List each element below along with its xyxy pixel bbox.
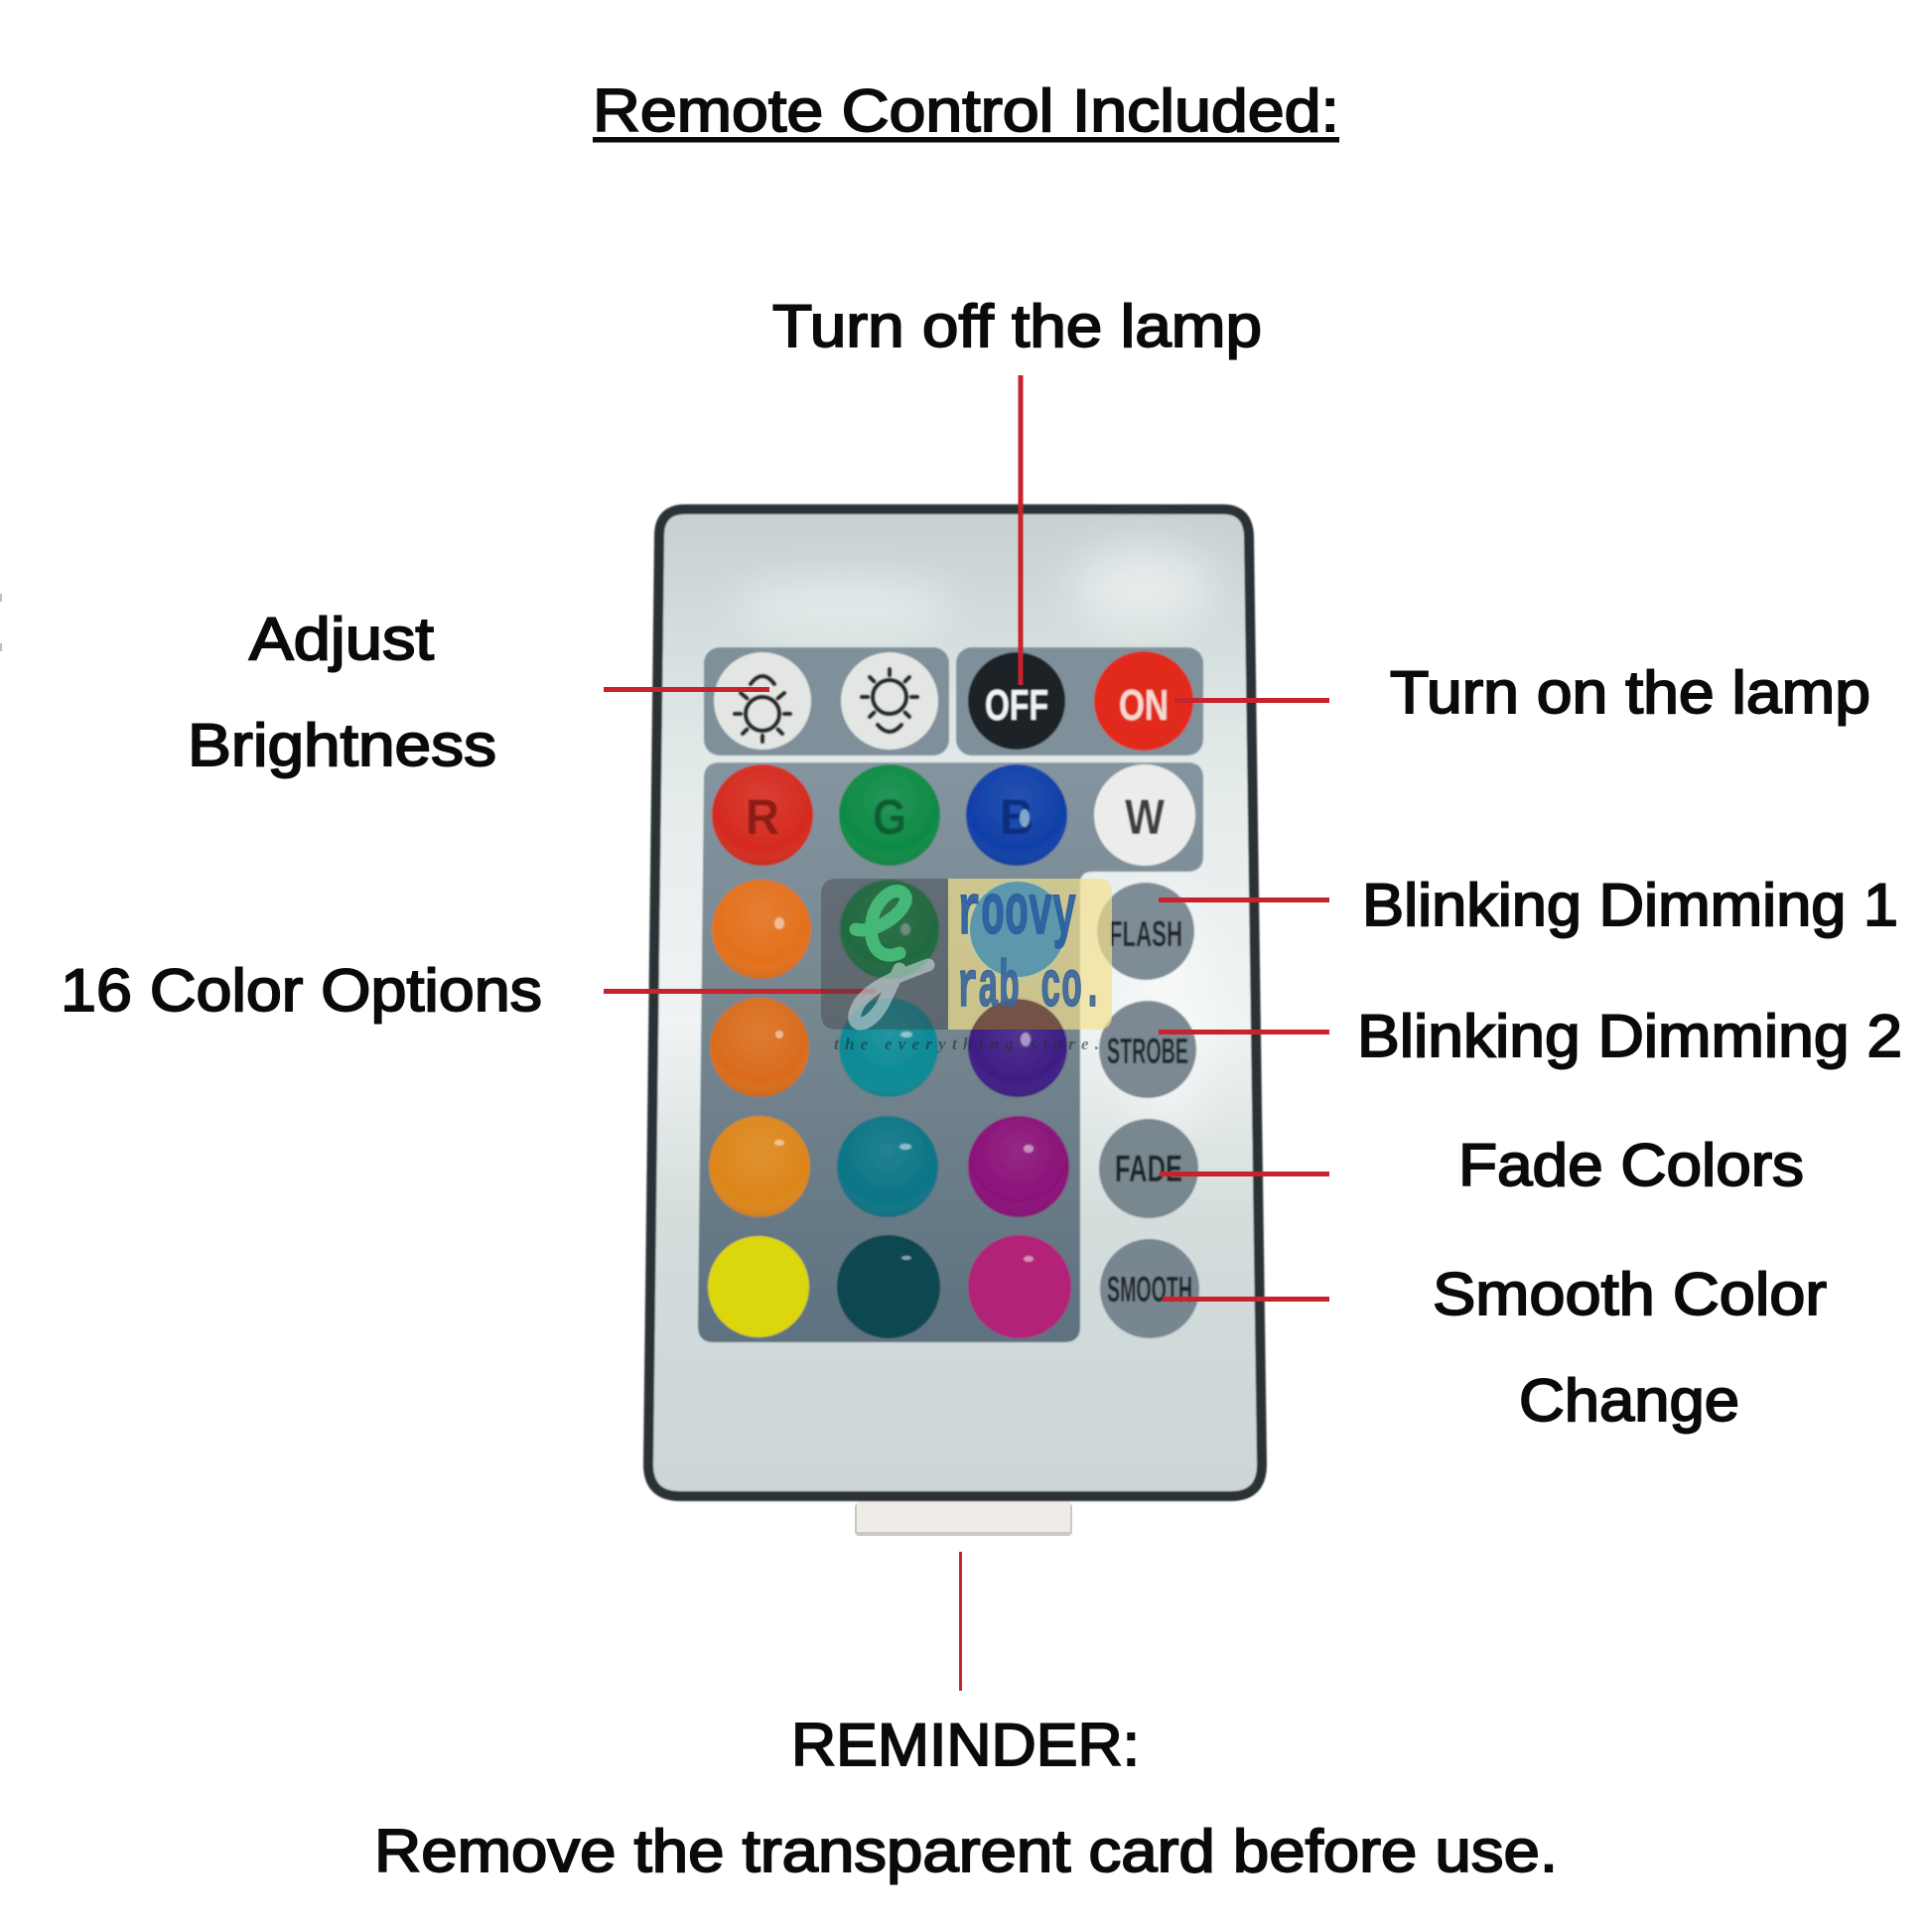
button: on: ON xyxy=(1119,681,1169,730)
reminder note xyxy=(374,1712,1558,1884)
label: blinking dimming 1: Blinking Dimming 1 xyxy=(1362,872,1898,938)
button: B xyxy=(966,764,1067,866)
colour buttons row 4 xyxy=(708,1235,1071,1338)
remote control xyxy=(648,509,1262,1496)
button: on xyxy=(1094,651,1193,751)
label: adjust brightness: Adjust xyxy=(249,606,434,672)
icon: sun with down arrow xyxy=(862,669,917,732)
button: W: W xyxy=(1125,789,1166,845)
brightness button panel xyxy=(704,647,949,756)
line: smooth xyxy=(1163,1297,1329,1302)
button highlights xyxy=(774,917,1035,1262)
power button panel xyxy=(956,647,1203,756)
label: turn off: Turn off the lamp xyxy=(772,293,1262,359)
remote body xyxy=(648,509,1262,1496)
label: smooth colour change: Smooth Color xyxy=(1433,1261,1827,1327)
button: strobe xyxy=(1099,1001,1196,1098)
button: G: G xyxy=(873,789,906,845)
label: fade colours: Fade Colors xyxy=(1458,1132,1804,1198)
reminder note: Remove the transparent card before use. xyxy=(374,1818,1558,1884)
line: colours xyxy=(604,989,876,994)
button: fade xyxy=(1099,1119,1198,1218)
label: smooth colour change xyxy=(1433,1261,1827,1434)
line: reminder xyxy=(959,1552,962,1691)
button: flash xyxy=(1097,883,1194,980)
button: R: R xyxy=(746,789,779,845)
title: Remote Control Included: xyxy=(593,77,1339,144)
line: flash xyxy=(1159,897,1329,902)
body highlights xyxy=(735,546,1211,1132)
watermark yellow plate xyxy=(948,879,1112,1030)
label: adjust brightness xyxy=(188,606,496,778)
colour buttons row 3 xyxy=(709,1116,1069,1217)
icon: script logo mark xyxy=(855,892,928,1024)
line: brightness xyxy=(604,687,769,692)
reminder note: REMINDER: xyxy=(791,1712,1140,1778)
edge artefacts xyxy=(0,594,2,651)
line: strobe xyxy=(1159,1030,1329,1035)
watermark dark plate xyxy=(821,879,948,1030)
button: R xyxy=(712,764,813,866)
transparent card tab xyxy=(855,1499,1072,1536)
colour button panel xyxy=(698,762,1203,1342)
line: on xyxy=(1174,698,1329,703)
button: W xyxy=(1094,764,1195,866)
icon: sun with up arrow xyxy=(735,676,790,742)
button: off: OFF xyxy=(985,681,1048,730)
button: fade: FADE xyxy=(1115,1149,1182,1190)
button: smooth: SMOOTH xyxy=(1107,1269,1192,1310)
watermark wordmark bottom: rab co. xyxy=(957,951,1103,1026)
line: off xyxy=(1019,375,1023,685)
line: fade xyxy=(1160,1172,1329,1176)
button: off xyxy=(968,652,1065,750)
button: brightness up xyxy=(714,652,811,750)
watermark xyxy=(821,874,1112,1053)
watermark tagline: the everything store. xyxy=(834,1035,1099,1053)
button: smooth xyxy=(1100,1239,1199,1338)
watermark wordmark top: roovy xyxy=(957,874,1076,955)
callout lines xyxy=(604,375,1329,1691)
label: turn on: Turn on the lamp xyxy=(1390,659,1870,726)
label: 16 colour options: 16 Color Options xyxy=(61,957,542,1024)
button: B: B xyxy=(1000,789,1034,845)
button: brightness down xyxy=(841,652,938,750)
button: flash: FLASH xyxy=(1109,913,1182,954)
colour buttons row 1 xyxy=(712,880,1067,979)
colour buttons row 2 xyxy=(710,998,1067,1097)
label: blinking dimming 2: Blinking Dimming 2 xyxy=(1357,1003,1902,1069)
label: adjust brightness: Brightness xyxy=(188,712,496,778)
button: G xyxy=(839,764,940,866)
tinted buttons under plate xyxy=(970,882,1065,1030)
label: smooth colour change: Change xyxy=(1519,1367,1739,1434)
button: strobe: STROBE xyxy=(1107,1031,1188,1071)
